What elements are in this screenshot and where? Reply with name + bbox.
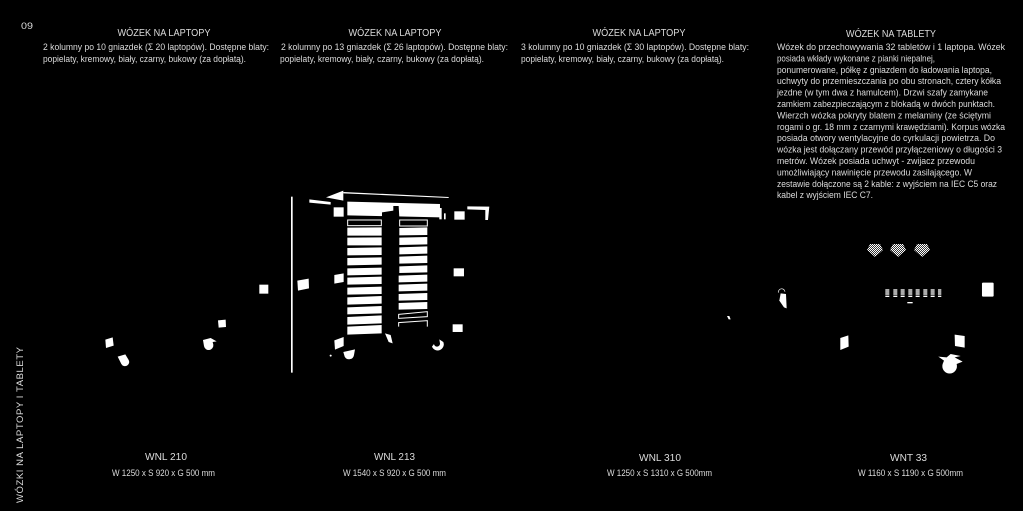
page number: 09 bbox=[21, 21, 33, 32]
body text: kabel z wyjściem IEC C7. bbox=[777, 190, 873, 201]
caption: WNL 210: W 1250 x S 920 x G 500 mm bbox=[112, 468, 215, 478]
panel: WNL 210 description bbox=[43, 26, 269, 65]
caption: WNL 213 bbox=[343, 451, 446, 478]
body text: posiada wkłady wykonane z pianki niepalnej, bbox=[777, 53, 935, 64]
sidebar section label: WÓZKI NA LAPTOPY I TABLETY bbox=[15, 346, 26, 503]
small parts bbox=[334, 207, 344, 217]
body text: wózka jest dołączany przewód przyłączeniowy o długości 3 bbox=[776, 145, 1002, 156]
body text: 3 kolumny po 10 gniazdek (Σ 30 laptopów). Dostępne blaty: bbox=[521, 42, 749, 53]
body text: uchwyty do przemieszczania po obu stronach, cztery kółka bbox=[777, 76, 1002, 87]
ventilation diamonds bbox=[867, 244, 930, 257]
heading: WÓZEK NA LAPTOPY bbox=[348, 26, 442, 39]
tablet slot ventilation marks bbox=[885, 289, 941, 303]
cart image: WNL 213 bbox=[291, 191, 489, 373]
body text: popielaty, kremowy, biały, czarny, bukowy (za dopłatą). bbox=[521, 54, 724, 65]
caption: WNL 213: W 1540 x S 920 x G 500 mm bbox=[343, 468, 446, 478]
caption: WNL 213: WNL 213 bbox=[374, 451, 415, 463]
body text bbox=[43, 42, 269, 65]
body text: ponumerowane, półkę z gniazdem do ładowania laptopa, bbox=[777, 65, 992, 76]
panel: WNL 310 description bbox=[521, 26, 749, 65]
caption: WNT 33 bbox=[858, 452, 963, 478]
cart image fragments: WNL 310 and WNT 33 bbox=[727, 283, 994, 374]
heading: WÓZEK NA LAPTOPY bbox=[118, 26, 211, 39]
body text: 2 kolumny po 10 gniazdek (Σ 20 laptopów). Dostępne blaty: bbox=[43, 42, 269, 53]
caption: WNL 210: WNL 210 bbox=[145, 451, 187, 463]
body text: zestawie dołączone są 2 kable: z wyjściem na IEC C5 oraz bbox=[777, 179, 997, 190]
body text: zamkiem zabezpieczającym z blokadą w dwóch punktach. bbox=[777, 99, 995, 110]
body text: 2 kolumny po 13 gniazdek (Σ 26 laptopów). Dostępne blaty: bbox=[281, 42, 508, 53]
caption: WNL 210 bbox=[112, 451, 215, 478]
WNL 310 fragments bbox=[727, 316, 731, 319]
cart column gap bbox=[382, 217, 399, 332]
top block bbox=[347, 202, 440, 217]
caption: WNL 310: W 1250 x S 1310 x G 500mm bbox=[607, 468, 712, 478]
left door strips bbox=[348, 220, 381, 226]
caption: WNL 310: WNL 310 bbox=[639, 452, 681, 464]
caption: WNT 33: WNT 33 bbox=[890, 452, 927, 464]
body text: Wierzch wózka pokryty blatem z melaminy (ze ściętymi bbox=[777, 110, 991, 121]
body text bbox=[776, 42, 1006, 201]
body text: Wózek do przechowywania 32 tabletów i 1 laptopa. Wózek bbox=[777, 42, 1005, 53]
cart side line bbox=[291, 197, 293, 373]
WNT 33 fragments bbox=[982, 283, 994, 297]
body text: metrów. Wózek posiada uchwyt - zwijacz przewodu bbox=[777, 156, 975, 167]
body text: popielaty, kremowy, biały, czarny, bukowy (za dopłatą). bbox=[280, 54, 484, 65]
top edge bbox=[326, 191, 343, 201]
body text bbox=[280, 42, 508, 65]
cart image fragments: WNL 210 bbox=[105, 285, 268, 366]
panel: WNL 213 description bbox=[280, 26, 508, 65]
body text: popielaty, kremowy, biały, czarny, bukowy (za dopłatą). bbox=[43, 54, 246, 65]
body text bbox=[521, 42, 749, 65]
right door strips bbox=[400, 220, 427, 226]
cart wheels bbox=[343, 349, 355, 359]
heading: WÓZEK NA TABLETY bbox=[846, 27, 936, 40]
panel: WNT 33 description bbox=[776, 27, 1006, 201]
body text: posiada otwory wentylacyjne do cyrkulacji powietrza. Do bbox=[777, 133, 995, 144]
heading: WÓZEK NA LAPTOPY bbox=[592, 26, 686, 39]
body text: umożliwiający nawinięcie przewodu zasilającego. W bbox=[777, 167, 973, 178]
caption: WNL 310 bbox=[607, 452, 712, 478]
body text: jezdne (w tym dwa z hamulcem). Drzwi szafy zamykane bbox=[776, 88, 988, 99]
caption: WNT 33: W 1160 x S 1190 x G 500mm bbox=[858, 468, 963, 478]
